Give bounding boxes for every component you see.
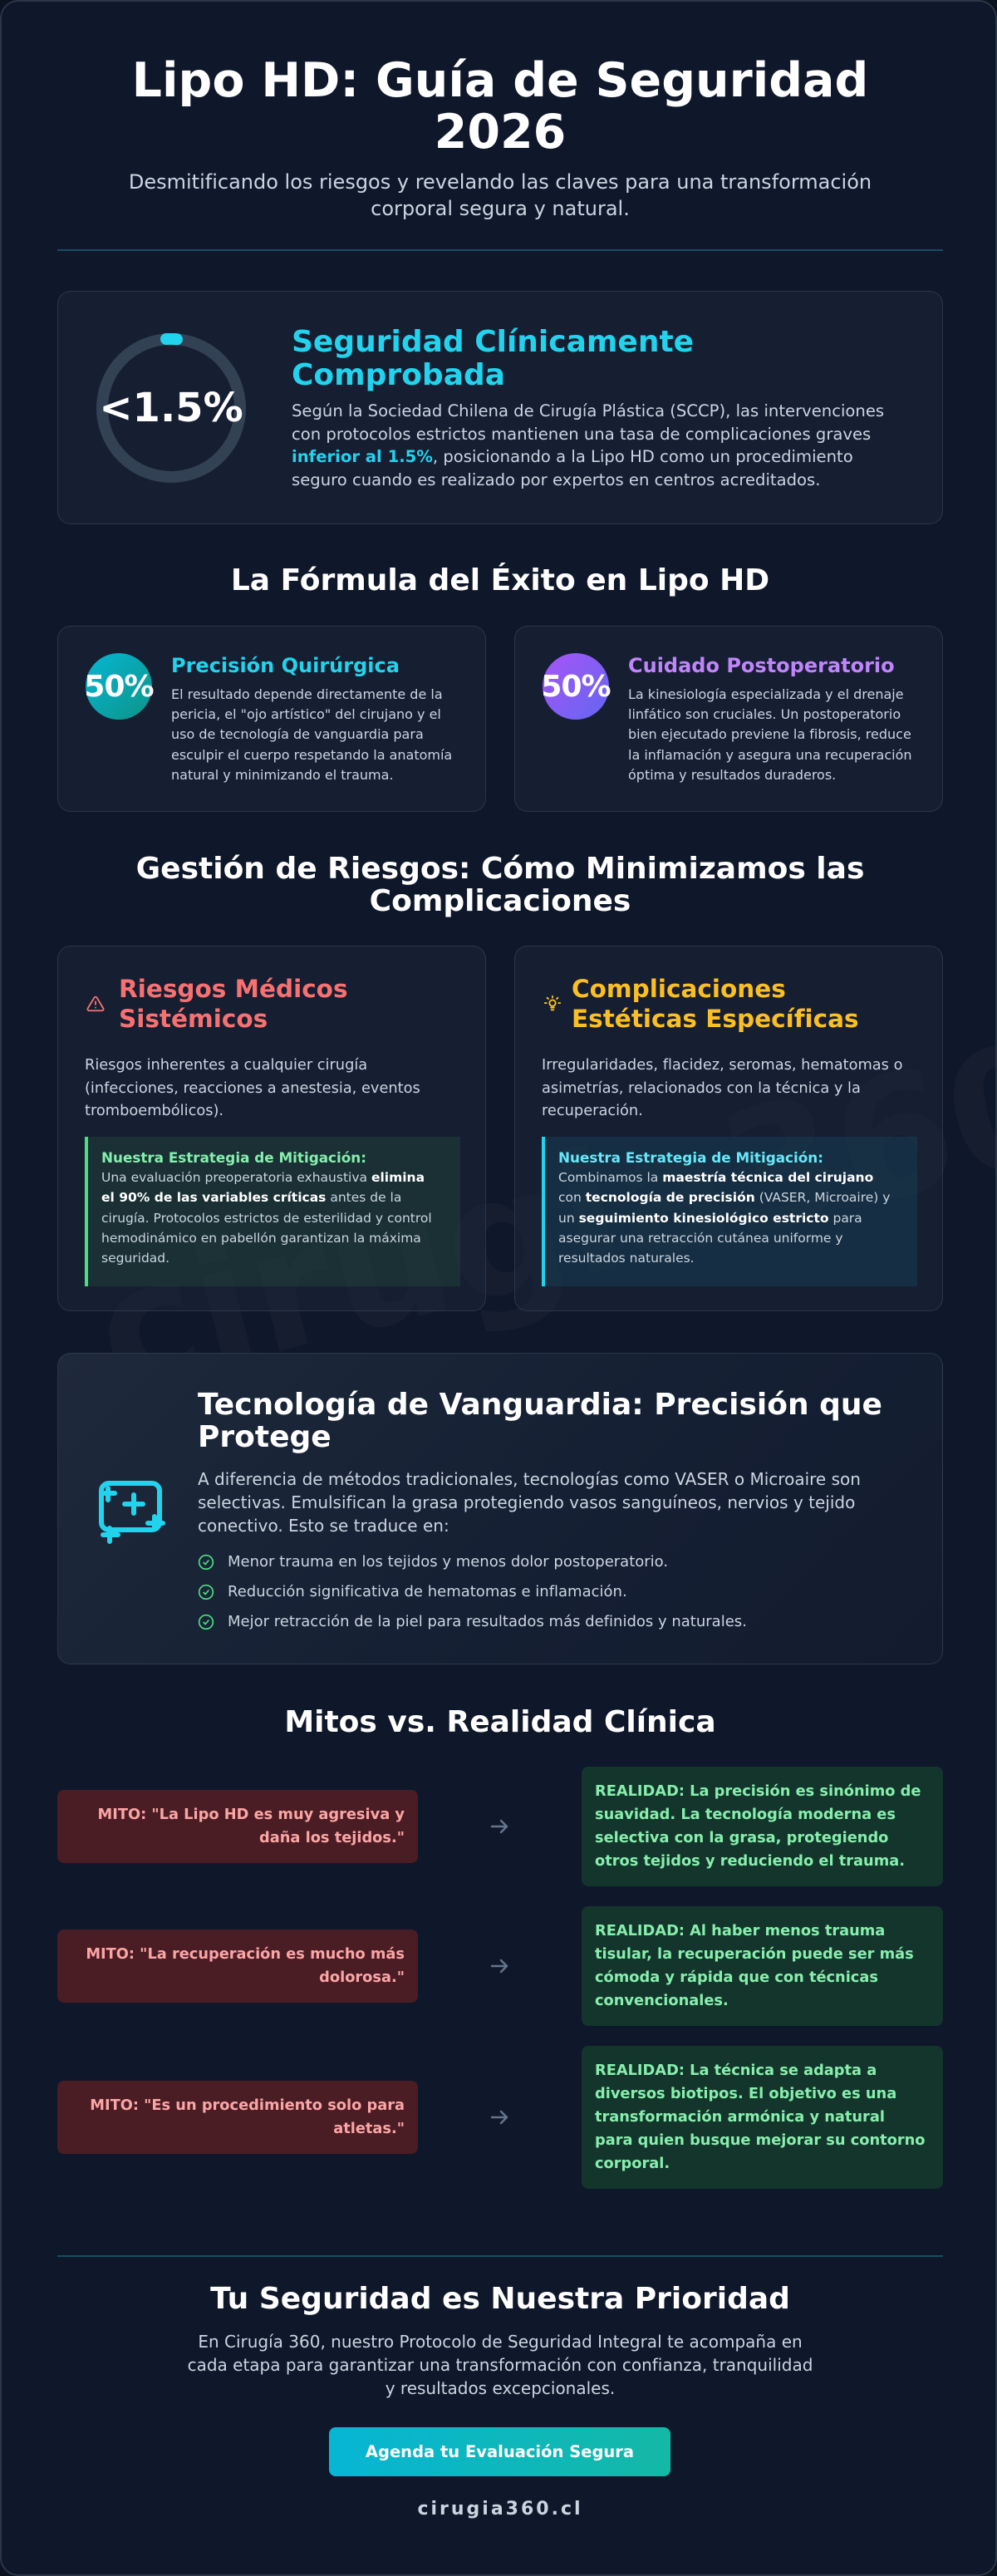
text: precision body: El resultado depende directamente de la pericia, el "ojo artístico" del cirujano y el uso de tecnología de vanguardia para esculpir el cuerpo respetando la anatomía natural y minimizando el trauma.	[171, 686, 452, 783]
button: CTA	[329, 2427, 670, 2476]
list: benefits	[198, 1553, 747, 1630]
myth row 1	[57, 1767, 943, 1886]
button: CTA: Agenda tu Evaluación Segura	[366, 2442, 634, 2461]
chart: ring <1.5%: <1.5%	[99, 385, 243, 431]
panel: medical risks	[57, 946, 486, 1311]
myth row 3: para quien busque mejorar su contorno corporal.	[595, 2131, 926, 2172]
callout: medical mitigation: Nuestra Estrategia de Mitigación:	[101, 1149, 366, 1166]
myth row 1: REALIDAD: La precisión es sinónimo de suavidad. La tecnología moderna es selectiva con la grasa, protegiendo otros tejidos y reduciendo el trauma.	[595, 1782, 921, 1870]
text: closing body: cada etapa para garantizar una transformación con confianza, tranquilidad	[188, 2355, 813, 2375]
heading: medical risks: Sistémicos	[119, 1005, 268, 1033]
myth row 2: REALIDAD: Al haber menos trauma tisular, la recuperación puede ser más cómoda y rápida que con técnicas convencionales.	[595, 1922, 914, 2009]
list: benefits: Menor trauma en los tejidos y menos dolor postoperatorio.	[228, 1553, 668, 1571]
myth row 3: MITO: "Es un procedimiento solo para atletas."	[90, 2097, 405, 2137]
callout: aesthetic mitigation: Nuestra Estrategia de Mitigación:	[558, 1149, 823, 1166]
footer: website: cirugia360.cl	[417, 2499, 583, 2519]
icon: 50% purple	[543, 653, 609, 720]
text: medical body: Riesgos inherentes a cualquier cirugía (infecciones, reacciones a anestesia, eventos tromboembólicos).	[85, 1056, 420, 1119]
heading: medical risks	[86, 975, 348, 1033]
myth row 2	[57, 1906, 943, 2026]
panel: safety stat	[57, 291, 943, 524]
callout: aesthetic mitigation: Combinamos la maestría técnica del cirujano con tecnología de precisión (VASER, Microaire) y un seguimiento kinesiológico estricto para asegurar una retracción cutánea uniforme y resultados naturales.	[558, 1170, 890, 1266]
title: Lipo HD: Guía de Seguridad 2026	[132, 53, 868, 160]
heading: risks: Gestión de Riesgos: Cómo Minimizamos las	[136, 852, 864, 886]
panel: technology	[57, 1353, 943, 1664]
heading: risks: Complicaciones	[370, 884, 631, 918]
icon: tech device	[99, 1481, 165, 1544]
heading: aesthetic: Complicaciones	[572, 975, 786, 1003]
callout: aesthetic mitigation	[542, 1137, 917, 1286]
text: aesthetic body: Irregularidades, flacidez, seromas, hematomas o asimetrías, relacionados con la técnica y la recuperación.	[542, 1056, 902, 1119]
text: postop body: La kinesiología especializada y el drenaje linfático son cruciales. Un postoperatorio bien ejecutado previene la fibrosis, reduce la inflamación y asegura una recuperación óptima y resultados duraderos.	[628, 686, 912, 783]
heading: myths: Mitos vs. Realidad Clínica	[284, 1705, 716, 1739]
text: tech title	[198, 1388, 882, 1454]
heading: aesthetic	[543, 975, 859, 1033]
heading: closing: Tu Seguridad es Nuestra Prioridad	[210, 2282, 790, 2316]
myth row 1: MITO: "La Lipo HD es muy agresiva y daña los tejidos."	[98, 1806, 405, 1846]
text: precision title: Precisión Quirúrgica	[171, 654, 400, 677]
text: safety heading: Seguridad Clínicamente	[292, 325, 694, 359]
heading: formula: La Fórmula del Éxito en Lipo HD	[231, 563, 769, 597]
text: closing body: y resultados excepcionales.	[386, 2378, 615, 2398]
list: benefits: Mejor retracción de la piel para resultados más definidos y naturales.	[228, 1613, 747, 1630]
myth row 2: MITO: "La recuperación es mucho más dolorosa."	[86, 1945, 405, 1986]
text: closing body	[188, 2332, 813, 2398]
callout: medical mitigation: Una evaluación preoperatoria exhaustiva elimina el 90% de las variables críticas antes de la cirugía. Protocolos estrictos de esterilidad y control hemodinámico en pabellón garantizan la máxima seguridad.	[101, 1170, 432, 1266]
myth row 3: REALIDAD: La técnica se adapta a diversos biotipos. El objetivo es una transformación armónica y natural	[595, 2062, 896, 2126]
panel: aesthetic complications	[514, 946, 943, 1311]
panel: precision	[57, 626, 486, 812]
text: safety heading	[292, 325, 694, 392]
subtitle: Desmitificando los riesgos y revelando las claves para una transformación corporal segura y natural.	[129, 170, 872, 220]
callout: medical mitigation	[85, 1137, 460, 1286]
chart: ring <1.5%	[96, 333, 246, 483]
icon: 50% teal: 50%	[84, 670, 154, 703]
text: tech title: Protege	[198, 1420, 332, 1454]
text: safety body: Según la Sociedad Chilena de Cirugía Plástica (SCCP), las intervenciones con protocolos estrictos mantienen una tasa de complicaciones graves inferior al 1.5%, posicionando a la Lipo HD como un procedimiento seguro cuando es realizado por expertos en centros acreditados.	[292, 401, 884, 489]
icon: 50% teal	[86, 653, 152, 720]
text: tech body: A diferencia de métodos tradicionales, tecnologías como VASER o Microaire son selectivas. Emulsifican la grasa protegiendo vasos sanguíneos, nervios y tejido conectivo. Esto se traduce en:	[198, 1469, 861, 1536]
icon: 50% purple: 50%	[541, 670, 611, 703]
panel: postop	[514, 626, 943, 812]
heading: medical risks: Riesgos Médicos	[119, 975, 348, 1003]
heading: aesthetic: Estéticas Específicas	[572, 1005, 859, 1033]
text: postop title: Cuidado Postoperatorio	[628, 654, 895, 677]
text: closing body: En Cirugía 360, nuestro Protocolo de Seguridad Integral te acompaña en	[198, 2332, 803, 2352]
heading: risks	[136, 852, 864, 918]
text: tech title: Tecnología de Vanguardia: Precisión que	[198, 1388, 882, 1422]
text: safety heading: Comprobada	[292, 358, 505, 392]
myth row 3	[57, 2046, 943, 2189]
list: benefits: Reducción significativa de hematomas e inflamación.	[228, 1583, 627, 1600]
